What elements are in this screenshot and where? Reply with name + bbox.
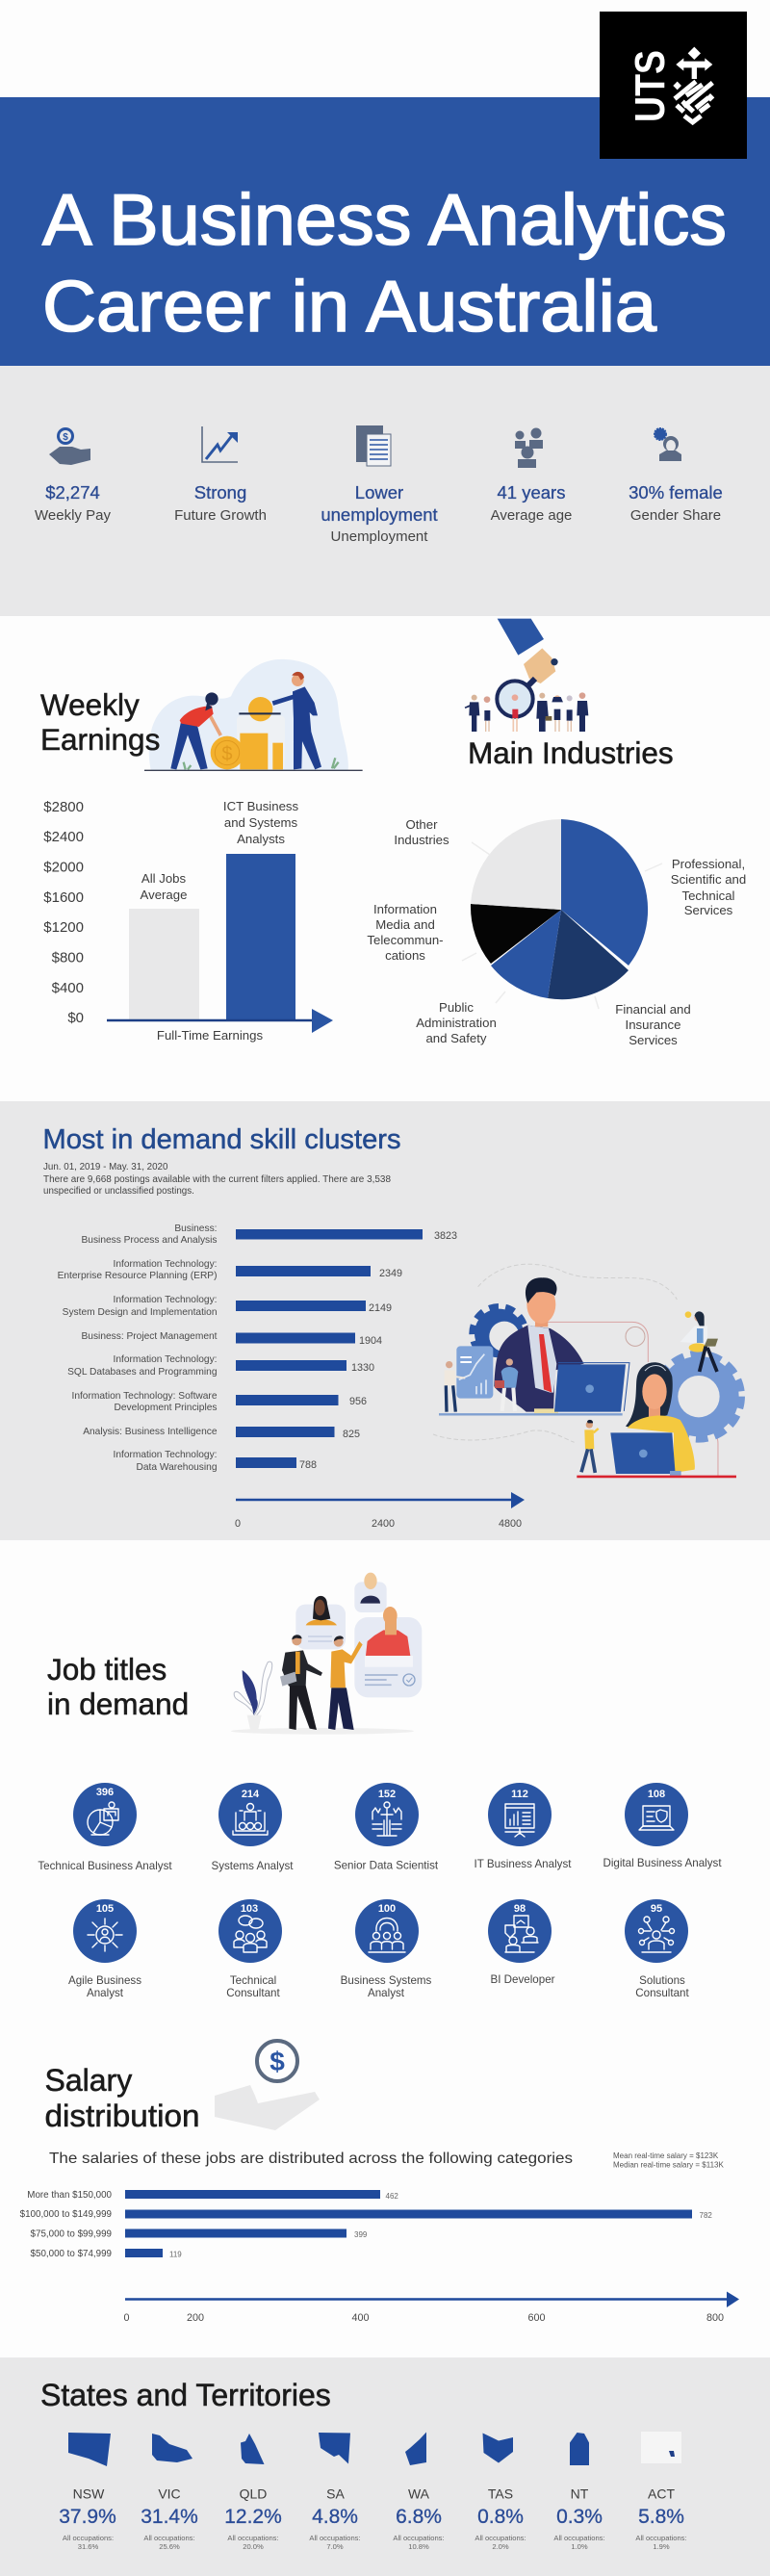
bar chart: salary distribution: $100,000 to $149,999 <box>20 2209 112 2220</box>
job: technical consultant: Technical <box>230 1974 276 1987</box>
state: ACT: 1.9% <box>653 2542 670 2551</box>
state: NSW: NSW <box>73 2486 105 2501</box>
title: A Business Analytics <box>42 179 727 260</box>
heading: states and territories: States and Territories <box>40 2378 331 2412</box>
job: business systems analyst <box>341 1899 432 1999</box>
icon: documents <box>356 425 391 466</box>
state: NSW: All occupations: <box>63 2534 114 2542</box>
bar: all jobs average <box>129 909 199 1020</box>
job: agile business analyst: Analyst <box>87 1987 124 1999</box>
bar chart: skills: 4800 <box>499 1518 522 1530</box>
state: NT: All occupations: <box>553 2534 605 2542</box>
state: VIC: 25.6% <box>159 2542 180 2551</box>
heading: weekly earnings <box>40 687 160 757</box>
job: solutions consultant: 95 <box>651 1903 662 1915</box>
job: agile business analyst: 105 <box>96 1903 114 1915</box>
bar chart: skills: Information Technology: <box>114 1354 218 1365</box>
pie labels: Information <box>373 902 437 916</box>
job: IT business analyst <box>475 1783 572 1870</box>
bar chart: skills: Analysis: Business Intelligence <box>83 1427 218 1437</box>
state: WA: All occupations: <box>393 2534 445 2542</box>
bar chart: skills: SQL Databases and Programming <box>67 1367 218 1378</box>
bar chart: salary distribution: More than $150,000 <box>27 2190 113 2201</box>
job: solutions consultant: Solutions <box>639 1974 685 1987</box>
bar chart: salary distribution: $75,000 to $99,999 <box>31 2229 112 2239</box>
bar chart: salary distribution <box>20 2190 739 2324</box>
pie labels: Other <box>406 817 438 832</box>
job: solutions consultant: Consultant <box>635 1987 689 1999</box>
icon: growth chart <box>202 426 238 462</box>
state: NT: 1.0% <box>571 2542 588 2551</box>
heading: salary distribution: Salary <box>44 2063 132 2098</box>
state: TAS: 0.8% <box>477 2506 524 2528</box>
illustration: people saving coins: $ <box>221 743 233 764</box>
y axis labels: $400 <box>52 980 84 996</box>
icon: hand holding dollar <box>215 2041 320 2130</box>
bar labels: Average <box>141 888 187 902</box>
state: VIC: VIC <box>158 2486 181 2501</box>
y axis labels: $2800 <box>43 799 84 815</box>
y axis labels <box>43 799 84 1026</box>
illustration: business team with gears <box>433 1264 741 1477</box>
panel: header band <box>0 97 770 366</box>
note: mean and median salary: Median real-time salary = $113K <box>613 2160 724 2170</box>
job: digital business analyst <box>603 1783 722 1869</box>
icon: people <box>515 427 543 468</box>
note: unspecified or unclassified postings. <box>43 1186 194 1197</box>
job: BI developer: BI Developer <box>490 1973 555 1986</box>
job: systems analyst: 214 <box>242 1789 260 1800</box>
state: NSW: 37.9% <box>59 2506 116 2528</box>
pie labels: Public <box>439 1000 474 1015</box>
stat: weekly pay <box>35 482 111 524</box>
bar chart: skills: 3823 <box>434 1230 457 1242</box>
job: senior data scientist <box>334 1783 439 1871</box>
state: QLD: 20.0% <box>243 2542 264 2551</box>
stat: weekly pay: Weekly Pay <box>35 507 111 524</box>
bar chart: salary distribution: 800 <box>706 2312 724 2324</box>
heading: most in demand skill clusters: Most in demand skill clusters <box>42 1124 400 1155</box>
job: systems analyst <box>211 1783 294 1872</box>
pie labels: Services <box>629 1033 678 1047</box>
stat: unemployment: Unemployment <box>331 528 428 545</box>
stat: average age: Average age <box>491 507 572 524</box>
state: NT <box>553 2433 605 2551</box>
job: digital business analyst: Digital Business Analyst <box>603 1857 722 1869</box>
bar chart: salary distribution: 200 <box>187 2312 204 2324</box>
state: NT: 0.3% <box>556 2506 603 2528</box>
bar chart: salary distribution: 0 <box>123 2312 130 2324</box>
pie labels: and Safety <box>425 1031 487 1045</box>
illustration: hand with magnifier over people <box>465 619 588 732</box>
text: salary intro: The salaries of these jobs are distributed across the following categories <box>49 2151 573 2167</box>
job: senior data scientist: 152 <box>378 1789 396 1800</box>
bar labels: and Systems <box>224 815 298 830</box>
bar chart: skills: 825 <box>343 1429 360 1440</box>
stat: unemployment: Lower <box>355 482 403 502</box>
state: NSW <box>59 2433 116 2551</box>
bar chart: skills <box>58 1224 525 1530</box>
job: technical consultant: Consultant <box>226 1987 280 1999</box>
pie labels <box>367 817 746 1047</box>
job: systems analyst: Systems Analyst <box>211 1860 294 1872</box>
bar labels <box>141 799 298 1043</box>
bar chart: weekly earnings <box>43 799 333 1043</box>
stat: gender share: 30% female <box>629 482 723 502</box>
state: VIC <box>141 2434 198 2551</box>
bar labels: ICT Business <box>223 799 298 813</box>
bar chart: skills: 956 <box>349 1396 367 1407</box>
note: There are 9,668 postings available with the current filters applied. There are 3,538 <box>43 1174 392 1185</box>
pie labels: Telecommun- <box>367 933 444 947</box>
state: SA: All occupations: <box>309 2534 361 2542</box>
stat: unemployment <box>321 482 438 545</box>
bar chart: skills: Business: <box>174 1224 218 1234</box>
stat: average age <box>491 482 572 524</box>
heading: salary distribution: distribution <box>44 2099 200 2133</box>
pie labels: Administration <box>416 1016 497 1030</box>
note: Jun. 01, 2019 - May. 31, 2020 <box>43 1162 168 1172</box>
pie labels: cations <box>385 948 425 963</box>
bar chart: skills: Development Principles <box>114 1403 218 1413</box>
heading: job titles in demand: in demand <box>47 1687 189 1721</box>
job: technical business analyst <box>38 1783 172 1872</box>
bar chart: skills: 1904 <box>359 1335 382 1347</box>
job: technical business analyst: Technical Business Analyst <box>38 1860 172 1872</box>
title: Career in Australia <box>42 266 656 347</box>
pie labels: Technical <box>682 889 735 903</box>
state: TAS: All occupations: <box>475 2534 526 2542</box>
y axis labels: $1200 <box>43 919 84 936</box>
heading: weekly earnings: Weekly <box>40 687 140 722</box>
y axis labels: $2000 <box>43 859 84 876</box>
state: QLD: 12.2% <box>224 2506 282 2528</box>
job: technical business analyst: 396 <box>96 1787 114 1798</box>
bar chart: skills: 2400 <box>372 1518 395 1530</box>
bar chart: skills: 2349 <box>379 1268 402 1279</box>
note: mean and median salary <box>613 2151 724 2170</box>
job: business systems analyst: Business Systems <box>341 1974 432 1987</box>
title <box>42 179 727 347</box>
bar chart: skills: Information Technology: <box>114 1259 218 1270</box>
bar chart: skills: Information Technology: <box>114 1295 218 1305</box>
bar chart: skills: 1330 <box>351 1362 374 1374</box>
pie labels: Scientific and <box>671 872 746 887</box>
bar chart: salary distribution: 782 <box>699 2211 712 2220</box>
bar chart: skills: Business: Project Management <box>81 1331 218 1342</box>
bar chart: skills: Data Warehousing <box>137 1462 218 1473</box>
heading: job titles in demand: Job titles <box>47 1652 167 1687</box>
state: ACT <box>635 2432 687 2551</box>
icon: hand with coin: $ <box>63 432 68 443</box>
note <box>43 1162 392 1197</box>
y axis labels: $1600 <box>43 889 84 906</box>
bar chart: salary distribution: 399 <box>354 2230 368 2239</box>
stat: future growth: Strong <box>194 482 246 502</box>
y axis labels: $0 <box>67 1010 84 1026</box>
heading: weekly earnings: Earnings <box>40 722 160 757</box>
bar chart: salary distribution: 400 <box>351 2312 370 2324</box>
bar chart: salary distribution: 119 <box>169 2251 182 2258</box>
bar chart: skills: Information Technology: <box>114 1450 218 1460</box>
panel: key stats <box>0 366 770 616</box>
job: digital business analyst: 108 <box>648 1789 665 1800</box>
state: TAS: 2.0% <box>492 2542 509 2551</box>
icon: hand with coin <box>49 427 90 465</box>
job titles grid <box>38 1783 722 1999</box>
stat: weekly pay: $2,274 <box>45 482 100 502</box>
state: NSW: 31.6% <box>78 2542 99 2551</box>
illustration: people saving coins <box>144 659 363 770</box>
pie labels: Services <box>684 903 733 917</box>
bar chart: skills: Enterprise Resource Planning (ERP) <box>58 1271 218 1281</box>
bar chart: skills: Information Technology: Software <box>71 1391 218 1402</box>
stat: future growth: Future Growth <box>174 507 267 524</box>
logo: UTS <box>600 12 747 159</box>
axis arrow <box>107 1009 333 1033</box>
heading: main industries: Main Industries <box>468 735 674 770</box>
state: QLD: QLD <box>240 2486 267 2501</box>
pie labels: Industries <box>394 833 449 847</box>
state: QLD: All occupations: <box>227 2534 279 2542</box>
bar labels: Analysts <box>237 832 285 846</box>
heading: salary distribution <box>44 2063 200 2133</box>
stat: gender share: Gender Share <box>630 507 721 524</box>
job: business systems analyst: Analyst <box>368 1987 405 1999</box>
job: IT business analyst: 112 <box>511 1789 528 1800</box>
job: technical consultant <box>218 1899 282 1999</box>
bar chart: salary distribution: 462 <box>385 2192 398 2201</box>
state: NT: NT <box>571 2486 589 2501</box>
state: WA: 10.8% <box>408 2542 429 2551</box>
y axis labels: $2400 <box>43 829 84 845</box>
pie labels: Professional, <box>672 857 745 871</box>
icon: hand holding dollar: $ <box>270 2047 285 2076</box>
state: TAS: TAS <box>488 2486 513 2501</box>
state: ACT: 5.8% <box>638 2506 684 2528</box>
job: agile business analyst: Agile Business <box>68 1974 141 1987</box>
bar chart: skills: 788 <box>299 1459 317 1471</box>
panel: states and territories <box>0 2357 770 2576</box>
state: WA <box>393 2432 445 2551</box>
y axis labels: $800 <box>52 949 84 966</box>
job: BI developer <box>488 1899 555 1986</box>
stat: future growth <box>174 482 267 524</box>
state: SA: SA <box>326 2486 345 2501</box>
bar chart: skills: System Design and Implementation <box>63 1307 218 1318</box>
bar chart: salary distribution: $50,000 to $74,999 <box>31 2249 112 2259</box>
bar chart: salary distribution: 600 <box>527 2312 546 2324</box>
state: SA <box>309 2433 361 2551</box>
job: agile business analyst <box>68 1899 141 1999</box>
state: VIC: 31.4% <box>141 2506 198 2528</box>
job: senior data scientist: Senior Data Scientist <box>334 1860 439 1871</box>
illustration: candidates and recruiters <box>231 1573 422 1735</box>
stat: average age: 41 years <box>498 482 565 502</box>
job: BI developer: 98 <box>514 1903 526 1915</box>
pie chart: main industries <box>367 817 746 1047</box>
bar chart: skills: Business Process and Analysis <box>81 1235 218 1246</box>
note: mean and median salary: Mean real-time salary = $123K <box>613 2151 719 2160</box>
job: technical consultant: 103 <box>241 1903 258 1915</box>
heading: job titles in demand <box>47 1652 189 1721</box>
panel: skill clusters <box>0 1101 770 1540</box>
state: TAS <box>475 2434 526 2551</box>
state: WA: WA <box>408 2486 430 2501</box>
pie labels: Financial and <box>615 1002 691 1017</box>
icon: female with gear <box>654 428 681 461</box>
state: SA: 7.0% <box>326 2542 344 2551</box>
state: VIC: All occupations: <box>143 2534 195 2542</box>
bar labels: Full-Time Earnings <box>157 1028 263 1043</box>
bar labels: All Jobs <box>141 871 186 886</box>
job: IT business analyst: IT Business Analyst <box>475 1858 572 1870</box>
job: business systems analyst: 100 <box>378 1903 396 1915</box>
bar chart: skills: 0 <box>235 1518 241 1530</box>
job: solutions consultant <box>625 1899 689 1999</box>
state: ACT: All occupations: <box>635 2534 687 2542</box>
stat: unemployment: unemployment <box>321 504 438 525</box>
pie labels: Media and <box>375 917 435 932</box>
bar chart: skills: 2149 <box>369 1302 392 1314</box>
state: QLD <box>224 2434 282 2551</box>
state: ACT: ACT <box>648 2486 675 2501</box>
state: SA: 4.8% <box>312 2506 358 2528</box>
logo: UTS: UTS <box>627 50 674 122</box>
pie labels: Insurance <box>626 1018 680 1032</box>
stat: gender share <box>629 482 723 524</box>
state: WA: 6.8% <box>396 2506 442 2528</box>
bar: ICT business and systems analysts <box>226 854 295 1020</box>
